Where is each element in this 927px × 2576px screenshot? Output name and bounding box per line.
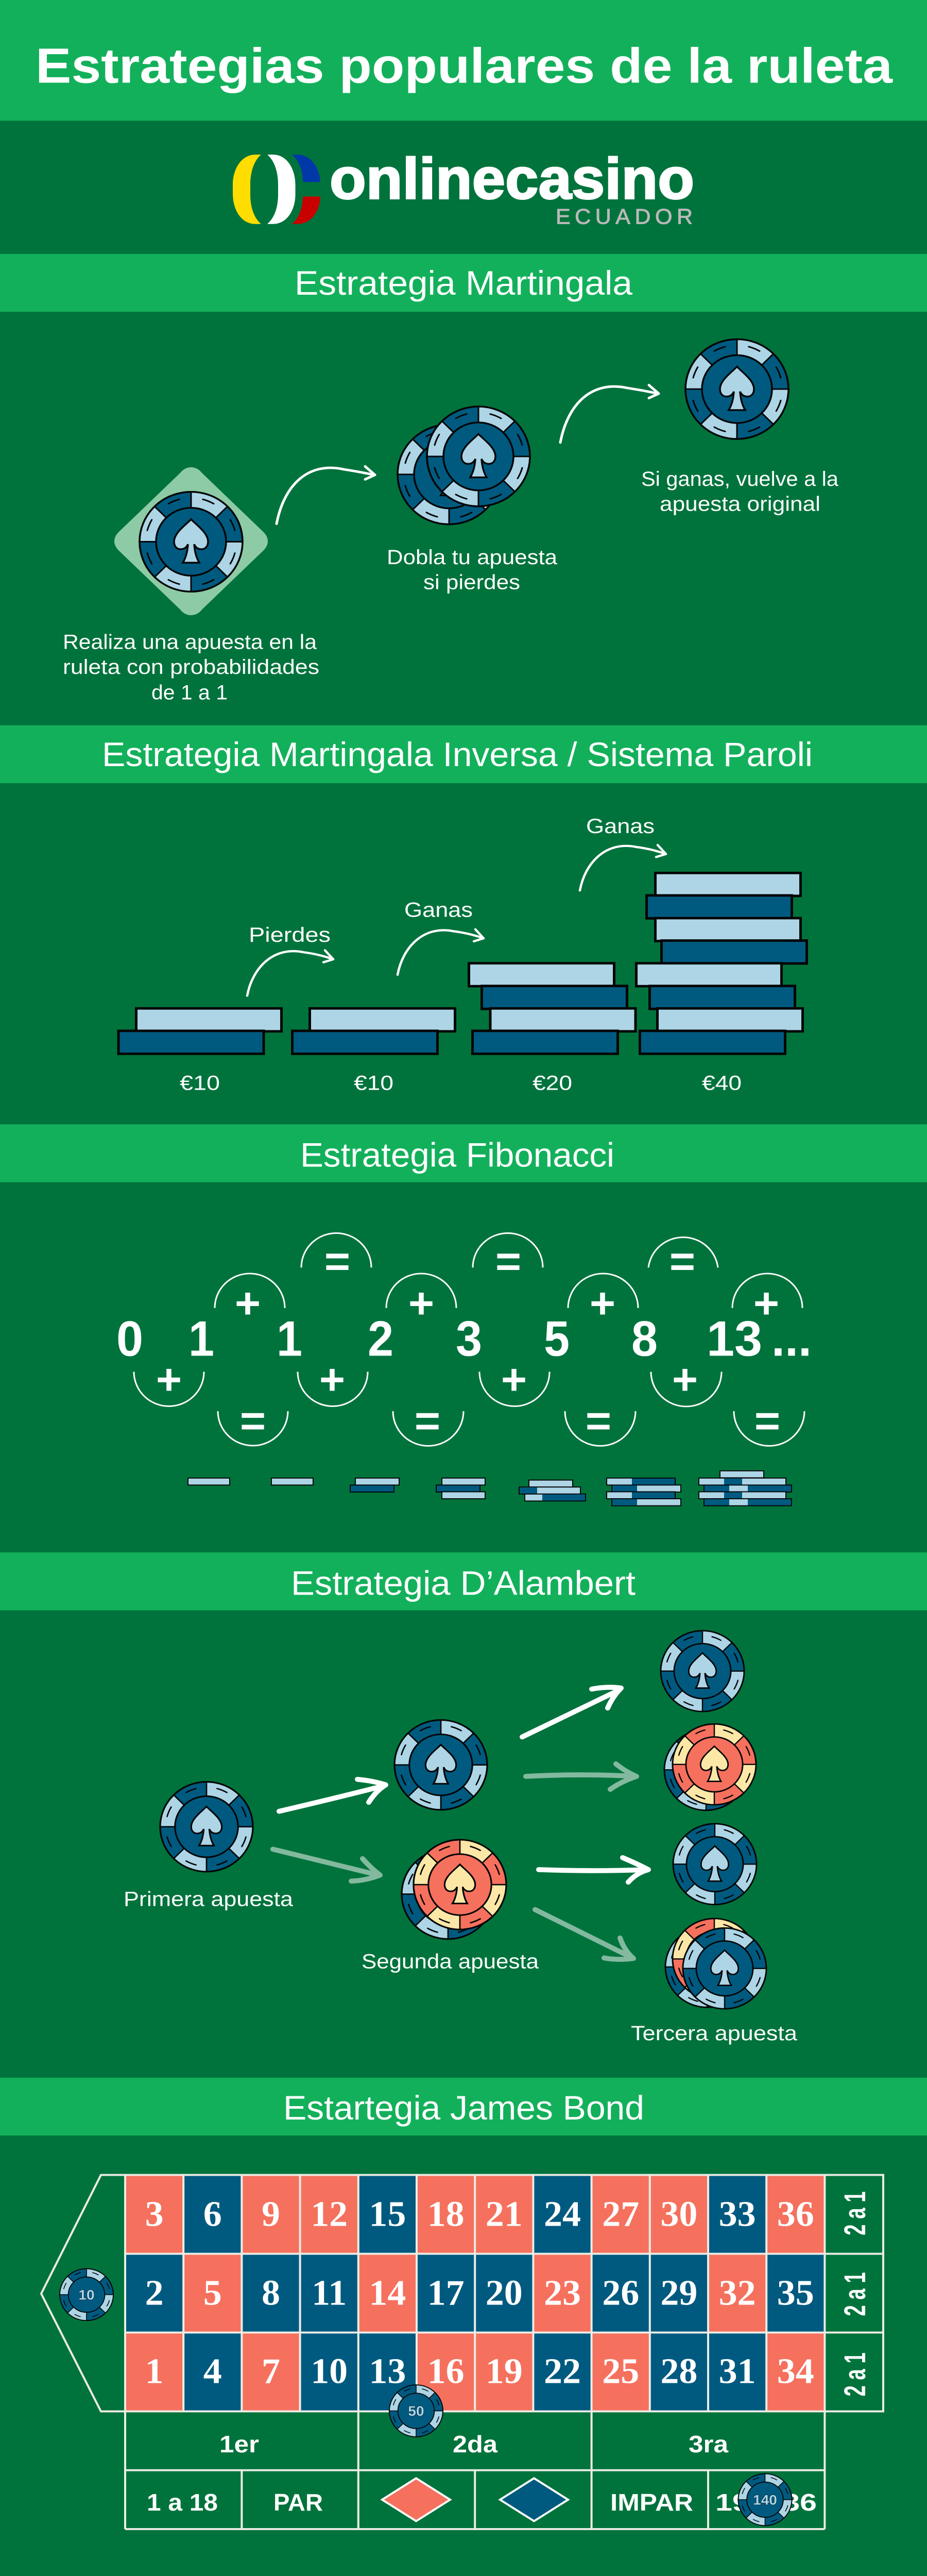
section heading: D'Alambert xyxy=(0,1552,927,1610)
arrow 1 xyxy=(277,466,375,524)
panel: D'Alambert tree xyxy=(124,1631,798,2045)
mini stack 6 xyxy=(607,1478,681,1506)
chip: third bet A xyxy=(661,1631,744,1711)
dozens row xyxy=(219,2431,729,2458)
plus and equals signs: + xyxy=(408,1279,434,1327)
diamond: blue xyxy=(500,2478,568,2521)
plus and equals signs: = xyxy=(495,1237,521,1285)
sequence numbers: 1 xyxy=(277,1311,302,1366)
mini stack 7 xyxy=(699,1471,792,1506)
plus and equals signs: = xyxy=(670,1237,695,1285)
chip: third bet C xyxy=(673,1824,757,1905)
sequence numbers: ... xyxy=(771,1311,812,1366)
step 2 text: si pierdes xyxy=(423,570,520,594)
plus and equals signs: = xyxy=(324,1237,350,1285)
even-money row: 1 a 18 xyxy=(147,2489,218,2516)
chip: second bet lose xyxy=(402,1840,506,1939)
row numbers top: 9 xyxy=(262,2194,280,2234)
label: Ganas: Ganas xyxy=(404,898,473,921)
step 3 text: Si ganas, vuelve a la xyxy=(641,467,839,490)
arrow: pierdes xyxy=(247,951,333,996)
mini stack 1 xyxy=(188,1478,230,1485)
row numbers bottom: 25 xyxy=(602,2351,639,2391)
mini stack 5 xyxy=(519,1480,586,1501)
arrow: win to third B xyxy=(526,1764,637,1789)
plus and equals signs: + xyxy=(672,1355,698,1403)
arrow: lose to third C xyxy=(539,1858,648,1882)
row numbers middle: 23 xyxy=(544,2273,581,2313)
row numbers bottom: 22 xyxy=(544,2351,581,2391)
row numbers bottom: 19 xyxy=(486,2351,523,2391)
row numbers middle: 5 xyxy=(203,2273,222,2313)
row numbers bottom: 28 xyxy=(660,2351,697,2391)
section heading: Martingala xyxy=(0,254,927,312)
chip: 50: 50 xyxy=(408,2403,424,2419)
title: Estrategias populares de la ruleta xyxy=(36,38,893,93)
row numbers middle: 20 xyxy=(486,2273,523,2313)
dozens row: 3ra xyxy=(689,2431,729,2458)
logo wordmark: onlinecasino xyxy=(330,147,694,211)
plus and equals signs: + xyxy=(590,1279,615,1327)
step 1 text xyxy=(63,630,319,704)
section heading: Fibonacci xyxy=(0,1124,927,1182)
column bets 2 a 1: 2 a 1 xyxy=(838,2352,872,2396)
section heading: Martingala: Estrategia Martingala xyxy=(295,264,633,302)
arrow: ganas 1 xyxy=(398,929,484,975)
row numbers bottom: 1 xyxy=(145,2351,164,2391)
row numbers middle xyxy=(145,2273,814,2313)
logo mark xyxy=(233,155,320,224)
section heading: James Bond xyxy=(0,2078,927,2136)
step 2 text: Dobla tu apuesta xyxy=(387,546,558,569)
row numbers bottom: 16 xyxy=(427,2351,465,2391)
plus and equals signs: + xyxy=(319,1355,345,1403)
step 1 text: Realiza una apuesta en la xyxy=(63,630,317,654)
title banner xyxy=(0,0,927,121)
mini stack 4 xyxy=(436,1478,485,1499)
diamond: salmon xyxy=(382,2478,450,2521)
row numbers middle: 26 xyxy=(602,2273,639,2313)
stack €10 first xyxy=(118,1008,281,1054)
label: Tercera apuesta: Tercera apuesta xyxy=(631,2022,798,2045)
column bets 2 a 1 xyxy=(838,2191,872,2396)
plus and equals signs: = xyxy=(415,1397,440,1445)
row numbers bottom: 7 xyxy=(262,2351,280,2391)
step 1 text: ruleta con probabilidades xyxy=(63,655,319,679)
panel: Fibonacci sequence xyxy=(116,1233,812,1506)
row numbers bottom: 34 xyxy=(777,2351,814,2391)
upper arcs xyxy=(215,1233,802,1308)
label: Segunda apuesta: Segunda apuesta xyxy=(362,1950,539,1973)
row numbers top: 6 xyxy=(203,2194,222,2234)
row numbers middle: 29 xyxy=(660,2273,697,2313)
row numbers top: 18 xyxy=(427,2194,465,2234)
row numbers top: 36 xyxy=(777,2194,814,2234)
row numbers top: 3 xyxy=(145,2194,164,2234)
section heading: D'Alambert: Estrategia D’Alambert xyxy=(291,1564,636,1602)
panel: roulette table xyxy=(41,2175,883,2529)
row numbers middle: 35 xyxy=(777,2273,814,2313)
sequence numbers xyxy=(116,1311,812,1366)
even-money row: PAR xyxy=(273,2489,323,2516)
mini stack 3 xyxy=(350,1478,399,1492)
row numbers bottom: 4 xyxy=(203,2351,222,2391)
label: €40: €40 xyxy=(702,1071,742,1094)
row numbers bottom: 10 xyxy=(311,2351,348,2391)
step 2 text xyxy=(387,546,558,594)
step 3 text: apuesta original xyxy=(660,492,820,515)
chip: third bet B xyxy=(664,1724,756,1810)
chip: 50 xyxy=(389,2385,443,2437)
row numbers middle: 11 xyxy=(312,2273,347,2313)
logo subtitle: ECUADOR xyxy=(556,205,693,229)
column bets 2 a 1: 2 a 1 xyxy=(838,2272,872,2316)
arrow: first to lose xyxy=(273,1849,380,1881)
section heading: James Bond: Estartegia James Bond xyxy=(283,2089,644,2127)
sequence numbers: 2 xyxy=(368,1311,393,1366)
row numbers top: 15 xyxy=(369,2194,406,2234)
chip: third bet D xyxy=(665,1919,766,2009)
arrow: ganas 2 xyxy=(580,845,666,890)
sequence numbers: 8 xyxy=(631,1311,658,1366)
chip: 10: 10 xyxy=(78,2287,95,2302)
panel: Martingala xyxy=(63,339,839,704)
even-money row xyxy=(147,2489,817,2516)
plus and equals signs: = xyxy=(586,1397,611,1445)
arrow: first to win xyxy=(279,1780,386,1811)
chip: first bet xyxy=(160,1782,253,1872)
plus and equals signs: + xyxy=(753,1279,779,1327)
sequence numbers: 1 xyxy=(188,1311,214,1366)
label: €10: €10 xyxy=(354,1071,393,1094)
row numbers bottom: 13 xyxy=(369,2351,406,2391)
label: Pierdes: Pierdes xyxy=(249,923,331,946)
logo: Online Casino Ecuador xyxy=(233,147,694,229)
row numbers top: 27 xyxy=(602,2194,639,2234)
step 3: single chip xyxy=(685,339,788,439)
column bets 2 a 1: 2 a 1 xyxy=(838,2191,872,2235)
stack €40 xyxy=(637,873,806,1054)
row numbers middle: 14 xyxy=(369,2273,406,2313)
label: Ganas top: Ganas xyxy=(586,815,655,838)
plus and equals signs: = xyxy=(754,1397,780,1445)
row numbers top: 12 xyxy=(311,2194,348,2234)
label: €10: €10 xyxy=(180,1071,220,1094)
row numbers bottom xyxy=(145,2351,814,2391)
section heading: Fibonacci: Estrategia Fibonacci xyxy=(300,1137,614,1174)
row numbers top: 21 xyxy=(486,2194,523,2234)
chip: 10 xyxy=(60,2269,113,2320)
label: Primera apuesta: Primera apuesta xyxy=(124,1887,294,1911)
plus and equals signs: + xyxy=(235,1279,261,1327)
row numbers top xyxy=(145,2194,814,2234)
stack €10 second xyxy=(293,1008,455,1054)
step 1: diamond with chip xyxy=(114,467,268,615)
dozens row: 1er xyxy=(219,2431,259,2458)
chip: 140: 140 xyxy=(753,2492,777,2507)
arrow 2 xyxy=(560,385,659,443)
arrow: lose to third D xyxy=(535,1909,633,1959)
panel: Paroli stacks xyxy=(118,815,806,1094)
section heading: Martingala Inversa: Estrategia Martingala Inversa / Sistema Paroli xyxy=(102,736,813,774)
chip: 140 xyxy=(739,2474,792,2526)
step 1 text: de 1 a 1 xyxy=(151,681,228,704)
row numbers middle: 32 xyxy=(719,2273,756,2313)
table grid lines xyxy=(41,2175,883,2529)
row numbers middle: 8 xyxy=(262,2273,280,2313)
arrow: win to third A xyxy=(522,1687,621,1737)
stack €20 xyxy=(469,963,636,1054)
sequence numbers: 5 xyxy=(544,1311,570,1366)
row numbers top: 33 xyxy=(719,2194,756,2234)
plus and equals signs xyxy=(156,1237,780,1445)
sequence numbers: 0 xyxy=(116,1311,143,1366)
mini stack 2 xyxy=(271,1478,313,1485)
number grid cells xyxy=(125,2175,825,2411)
dozens row: 2da xyxy=(453,2431,498,2458)
label: €20: €20 xyxy=(533,1071,572,1094)
even-money row: 19 a 36 xyxy=(715,2489,817,2516)
row numbers bottom: 31 xyxy=(719,2351,756,2391)
even-money row: IMPAR xyxy=(610,2489,693,2516)
step 3 text xyxy=(641,467,839,515)
plus and equals signs: = xyxy=(240,1397,266,1445)
row numbers middle: 2 xyxy=(145,2273,164,2313)
sequence numbers: 13 xyxy=(707,1311,762,1366)
plus and equals signs: + xyxy=(501,1355,527,1403)
section heading: Martingala Inversa xyxy=(0,725,927,783)
row numbers middle: 17 xyxy=(427,2273,465,2313)
lower arcs xyxy=(134,1372,804,1446)
plus and equals signs: + xyxy=(156,1355,182,1403)
step 2: double chips xyxy=(398,406,530,524)
row numbers top: 30 xyxy=(660,2194,697,2234)
chip: second bet win xyxy=(394,1720,487,1810)
row numbers top: 24 xyxy=(544,2194,581,2234)
sequence numbers: 3 xyxy=(456,1311,482,1366)
